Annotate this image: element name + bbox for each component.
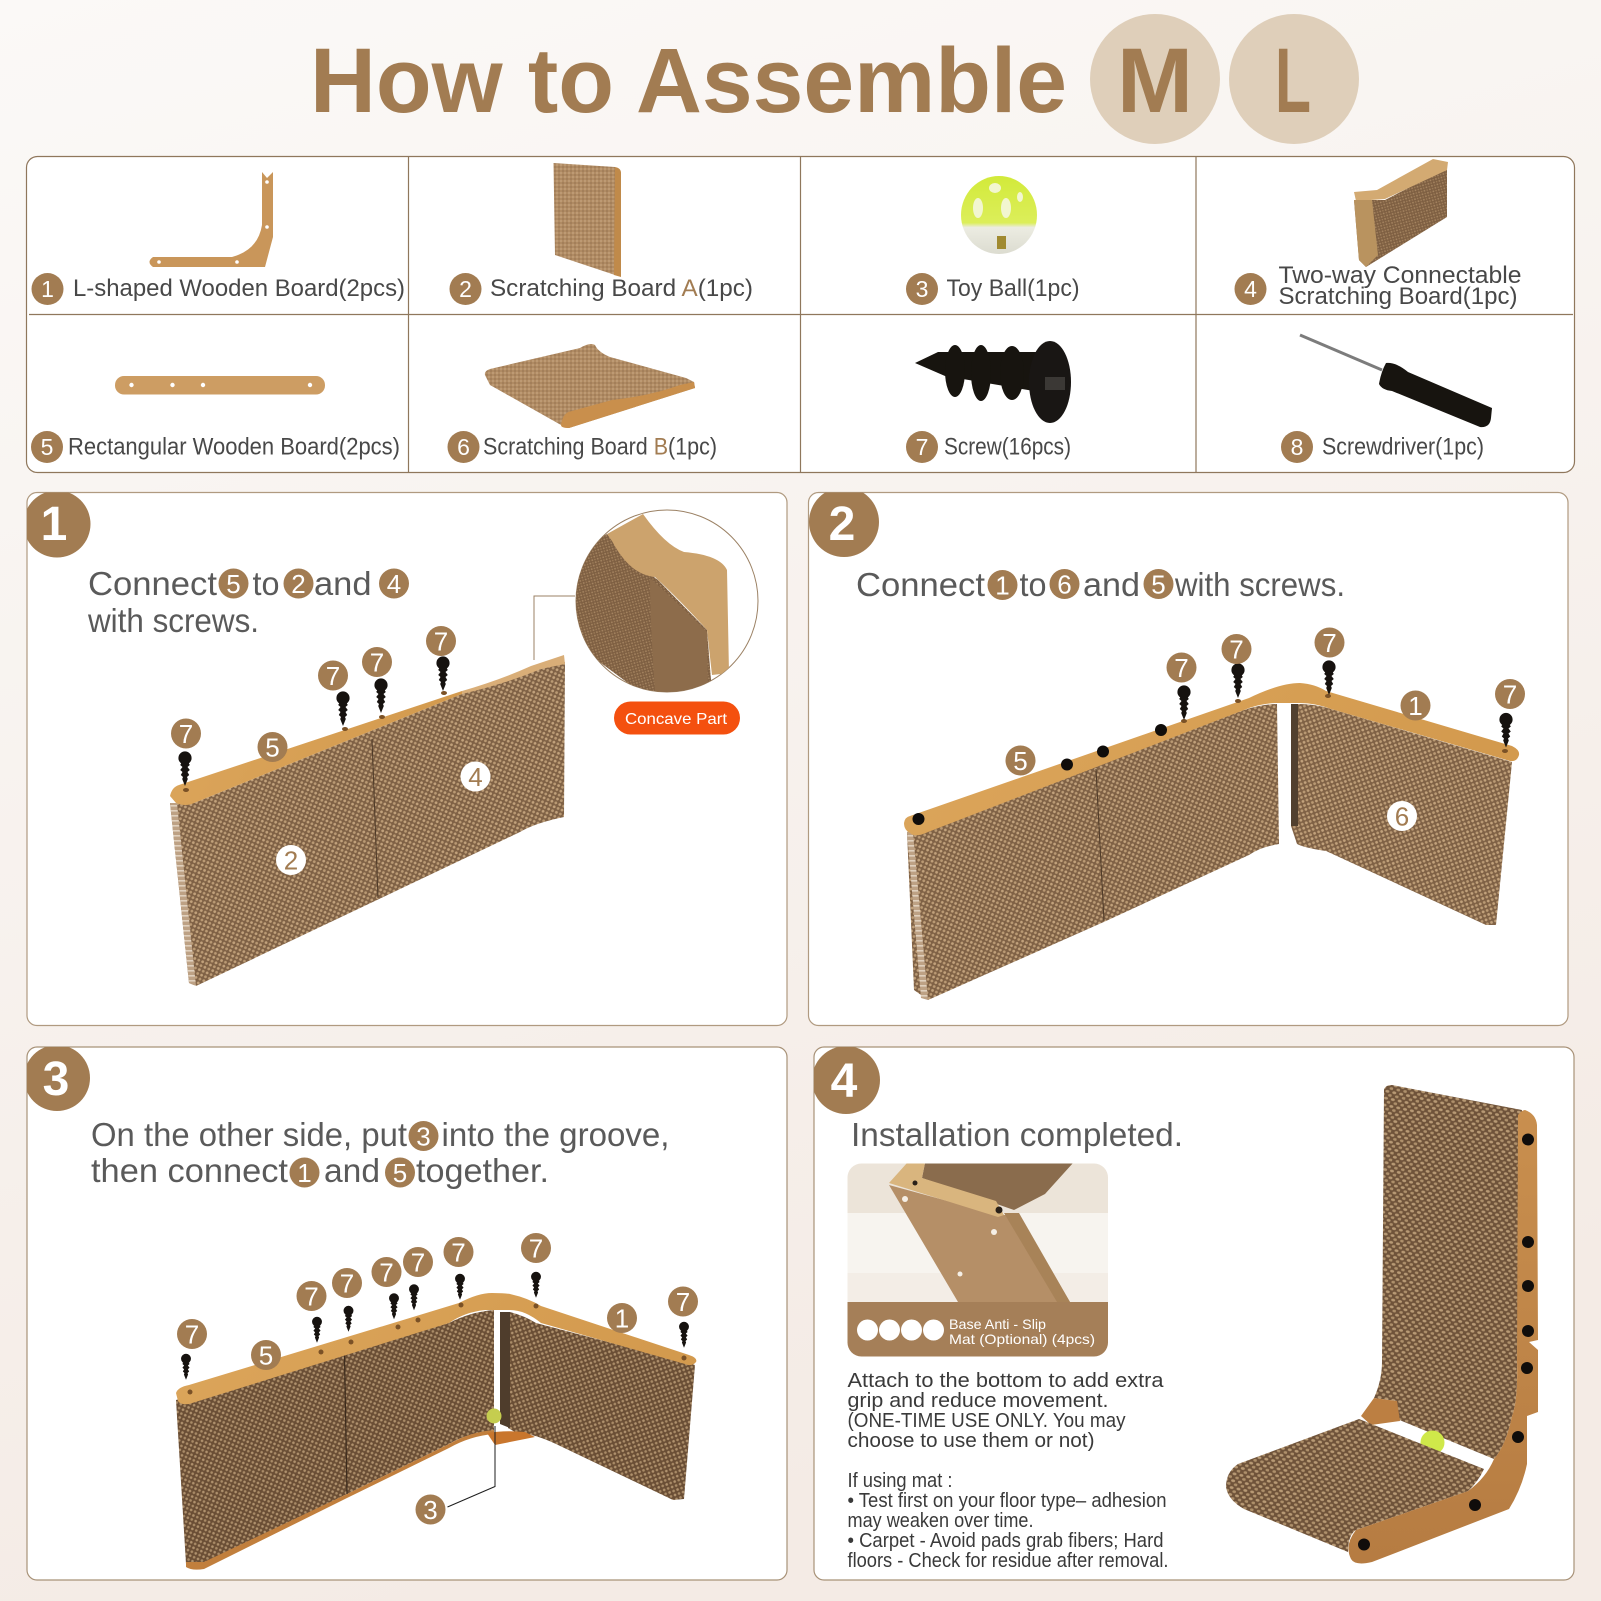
part 2: scratching board A <box>450 163 753 305</box>
part 8: screwdriver: 8 <box>1291 434 1303 460</box>
concave part label: Concave Part <box>625 711 728 728</box>
part 2: scratching board A: 2 <box>459 276 472 302</box>
part 1: L-shaped wooden board <box>32 172 405 305</box>
instruction text: to <box>252 565 280 602</box>
step number 4: 4 <box>831 1055 858 1108</box>
step number 3 <box>24 1045 90 1111</box>
part number labels: 7 <box>434 626 448 656</box>
instruction text: Connect <box>88 565 217 602</box>
part 3: toy ball: Toy Ball(1pc) <box>946 275 1080 302</box>
title <box>310 14 1359 144</box>
heading: Installation completed. <box>851 1116 1183 1153</box>
mat dots <box>857 1320 944 1340</box>
part number labels: 5 <box>265 732 280 762</box>
ball in groove <box>486 1408 502 1424</box>
assembled boards 2 and 4 with strip 5 <box>170 655 565 986</box>
anti-slip mat photo <box>847 1163 1109 1357</box>
concave part label <box>614 702 740 734</box>
mat caption: Mat (Optional) (4pcs) <box>949 1331 1095 1347</box>
part 4: two-way connectable scratching board: 4 <box>1244 276 1257 302</box>
instruction text: with screws. <box>87 602 259 639</box>
assembled boards seen from other side <box>176 1293 696 1570</box>
instruction text: 2 <box>291 569 306 599</box>
screws <box>1177 660 1513 748</box>
part 7: screw: 7 <box>916 434 928 460</box>
instruction text: with screws. <box>1174 566 1345 603</box>
panel: step 4 <box>812 1046 1574 1580</box>
finished scratcher <box>1226 1085 1538 1563</box>
part number labels: 7 <box>529 1234 543 1264</box>
part 5: rectangular wooden board: Rectangular Wooden Board(2pcs) <box>68 434 400 460</box>
instruction text: 4 <box>387 569 401 599</box>
part 4: two-way connectable scratching board <box>1234 159 1522 310</box>
step number 3: 3 <box>43 1053 69 1106</box>
part 8: screwdriver <box>1281 335 1492 463</box>
part number labels: 7 <box>340 1268 354 1298</box>
instruction text <box>91 1116 670 1189</box>
leader line to detail <box>534 596 575 660</box>
instruction text <box>856 566 1345 603</box>
instructions body text: may weaken over time. <box>848 1510 1034 1532</box>
part number labels: 7 <box>179 719 193 749</box>
instruction text: Connect <box>856 566 985 603</box>
mat caption <box>949 1316 1095 1347</box>
instruction text: 5 <box>226 569 241 599</box>
title: How to Assemble <box>310 30 1067 132</box>
part number labels <box>171 626 490 876</box>
screws <box>181 1272 689 1380</box>
step number 4 <box>812 1046 880 1114</box>
instruction text <box>87 565 409 639</box>
instruction text: and <box>324 1152 380 1189</box>
part number labels: 7 <box>1229 634 1244 664</box>
part 5: rectangular wooden board: 5 <box>41 434 53 460</box>
part number labels: 5 <box>1013 746 1028 776</box>
part 6: scratching board B <box>448 344 717 463</box>
instructions body text: floors - Check for residue after removal. <box>848 1550 1168 1572</box>
instruction text: 1 <box>995 570 1010 600</box>
instruction text: and <box>1083 566 1140 603</box>
instruction text: 3 <box>416 1122 431 1152</box>
part number labels: 2 <box>284 846 298 876</box>
part 8: screwdriver: Screwdriver(1pc) <box>1322 434 1484 460</box>
part number labels <box>177 1233 698 1525</box>
instruction text: On the other side, put <box>91 1116 407 1153</box>
part number labels: 7 <box>1503 680 1517 710</box>
instruction text: and <box>314 565 372 602</box>
part number labels: 7 <box>370 648 384 678</box>
instructions body text: • Carpet - Avoid pads grab fibers; Hard <box>848 1530 1164 1552</box>
part number labels: 6 <box>1395 802 1409 832</box>
part number labels: 7 <box>676 1287 690 1317</box>
instruction text: together. <box>416 1152 549 1189</box>
step number 2: 2 <box>829 498 855 551</box>
part number labels <box>1006 628 1525 832</box>
part number labels: 7 <box>379 1258 394 1288</box>
part 7: screw <box>906 341 1071 463</box>
instructions body text: choose to use them or not) <box>848 1430 1094 1452</box>
instruction text: 5 <box>1151 570 1166 600</box>
panel: parts table <box>26 156 1574 472</box>
panel: step 3 <box>24 1045 787 1580</box>
detail circle: concave part <box>560 510 758 692</box>
screws <box>178 656 450 786</box>
part number labels: 5 <box>259 1340 273 1370</box>
step number 1: 1 <box>41 498 67 551</box>
size badge M <box>1090 14 1220 144</box>
part 6: scratching board B: Scratching Board B(1pc) <box>483 434 717 460</box>
part number labels: 7 <box>1322 628 1337 658</box>
panel: step 1 <box>24 490 787 1026</box>
instructions body text: grip and reduce movement. <box>848 1390 1108 1412</box>
instructions body text <box>848 1370 1168 1572</box>
part number labels: 7 <box>304 1282 319 1312</box>
step number 1 <box>24 490 90 558</box>
part 1: L-shaped wooden board: 1 <box>41 276 54 302</box>
instructions body text: Attach to the bottom to add extra <box>848 1370 1164 1392</box>
instruction text: into the groove, <box>442 1116 670 1153</box>
part 3: toy ball: 3 <box>916 276 928 302</box>
part number labels: 3 <box>423 1495 438 1525</box>
panel: step 2 <box>808 487 1568 1026</box>
instruction text: 5 <box>393 1158 407 1188</box>
part 6: scratching board B: 6 <box>457 434 470 460</box>
part 4: two-way connectable scratching board: Scratching Board(1pc) <box>1278 283 1518 310</box>
instructions body text: (ONE-TIME USE ONLY. You may <box>848 1410 1126 1432</box>
part number labels: 7 <box>1174 653 1189 683</box>
part number labels: 7 <box>451 1238 466 1268</box>
mat caption: Base Anti - Slip <box>949 1316 1046 1332</box>
assembled boards with L strip <box>904 683 1519 1000</box>
part number labels: 7 <box>326 661 340 691</box>
instruction text: 6 <box>1057 570 1072 600</box>
part 7: screw: Screw(16pcs) <box>944 434 1071 460</box>
instructions body text: If using mat : <box>848 1470 952 1492</box>
leader line to label 3 <box>448 1426 495 1507</box>
instructions body text: • Test first on your floor type– adhesion <box>848 1490 1166 1512</box>
instruction text: then connect <box>91 1152 288 1189</box>
size badge M: M <box>1117 30 1193 132</box>
part 3: toy ball <box>906 176 1080 305</box>
part number labels: 1 <box>1408 691 1423 721</box>
size badge L: L <box>1275 30 1311 132</box>
part 1: L-shaped wooden board: L-shaped Wooden Board(2pcs) <box>73 275 405 302</box>
part number labels: 7 <box>411 1248 425 1278</box>
step number 2 <box>809 487 879 557</box>
part 2: scratching board A: Scratching Board A(1pc) <box>490 275 753 302</box>
size badge L <box>1229 14 1359 144</box>
part number labels: 7 <box>185 1320 199 1350</box>
instruction text: 1 <box>297 1158 312 1188</box>
instruction text: to <box>1020 566 1046 603</box>
part 4: two-way connectable scratching board: Two-way Connectable <box>1278 262 1522 289</box>
part number labels: 1 <box>615 1304 629 1334</box>
part 5: rectangular wooden board <box>31 376 400 463</box>
part number labels: 4 <box>468 762 483 792</box>
